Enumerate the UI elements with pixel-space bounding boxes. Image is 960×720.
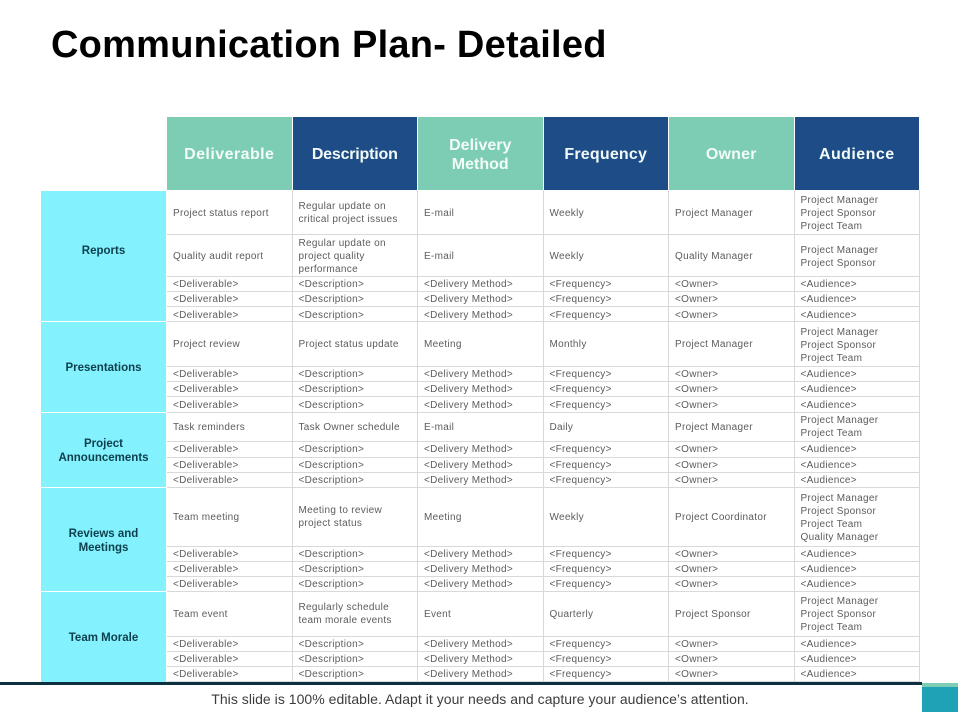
- table row: placeholder: <Owner>: [675, 564, 718, 574]
- table row: placeholder: <Audience>: [800, 368, 857, 380]
- table row: Task reminders: Project Team: [800, 428, 862, 439]
- row label: Team Morale: Team Morale: [69, 632, 138, 644]
- table row: Team meeting: Meeting: [424, 512, 462, 522]
- table row: placeholder: <Owner>: [675, 578, 718, 590]
- table row: Project review: Meeting: [424, 338, 462, 350]
- table row: Project status report: Regular update on: [298, 201, 386, 212]
- table row: placeholder: <Deliverable>: [173, 310, 239, 320]
- table row: placeholder: <Audience>: [800, 548, 857, 560]
- table row: placeholder: <Deliverable>: [173, 578, 239, 590]
- table row: placeholder: <Description>: [298, 310, 364, 320]
- table row: Task reminders: Project Manager: [675, 422, 753, 432]
- table row: placeholder: <Deliverable>: [173, 460, 239, 470]
- table row: placeholder: <Delivery Method>: [424, 460, 513, 470]
- table row: Team meeting: Project Sponsor: [800, 506, 876, 517]
- table row: Team event: Project Team: [800, 622, 862, 632]
- table row: placeholder: <Deliverable>: [173, 564, 239, 574]
- table row: placeholder: <Deliverable>: [173, 654, 239, 664]
- table row: Quality audit report: performance: [298, 264, 358, 275]
- row label: Team Morale: [41, 592, 166, 682]
- table row: Team event: Event: [424, 608, 451, 620]
- table row: Quality audit report: Weekly: [550, 251, 584, 262]
- table row: placeholder: <Owner>: [675, 310, 718, 320]
- table row: placeholder: <Audience>: [800, 474, 857, 486]
- header: Audience: Audience: [819, 146, 895, 163]
- table row: placeholder: <Owner>: [675, 368, 718, 380]
- table row: placeholder: <Description>: [298, 638, 364, 650]
- table row: Project status report: Project status report: [173, 208, 269, 218]
- table row: placeholder: <Deliverable>: [173, 294, 239, 304]
- table row: placeholder: [167, 382, 920, 397]
- table row: Project status report: Weekly: [550, 208, 584, 218]
- table row: placeholder: <Audience>: [800, 564, 857, 574]
- table row: placeholder: <Description>: [298, 384, 364, 394]
- table row: placeholder: <Deliverable>: [173, 444, 239, 455]
- footer corner square: [922, 683, 958, 712]
- header: Description: Description: [312, 146, 398, 163]
- table row: placeholder: <Owner>: [675, 384, 718, 394]
- header: Audience: [794, 117, 919, 190]
- table row: Team meeting: [167, 488, 920, 547]
- table row: placeholder: <Description>: [298, 368, 364, 380]
- table row: Project review: Project Team: [800, 352, 862, 364]
- table row: Project review: Project Sponsor: [800, 340, 876, 350]
- table row: placeholder: <Description>: [298, 654, 364, 664]
- table row: Team meeting: Weekly: [550, 512, 584, 522]
- table row: placeholder: <Frequency>: [550, 654, 612, 664]
- table row: placeholder: <Deliverable>: [173, 368, 239, 380]
- table row: placeholder: <Owner>: [675, 400, 718, 411]
- table row: Team event: Project Sponsor: [675, 608, 751, 620]
- table row: placeholder: <Description>: [298, 668, 364, 680]
- table row: Team event: Project Manager: [800, 596, 878, 606]
- table row: placeholder: <Frequency>: [550, 564, 612, 574]
- table row: Quality audit report: Regular update on: [298, 238, 386, 249]
- table row: placeholder: [167, 307, 920, 322]
- table row: placeholder: [167, 547, 920, 562]
- table row: Team event: Quarterly: [550, 608, 593, 620]
- table row: placeholder: <Deliverable>: [173, 400, 239, 411]
- table row: Project status report: E-mail: [424, 208, 454, 218]
- table row: Task reminders: Project Manager: [800, 415, 878, 426]
- table row: Quality audit report: project quality: [298, 251, 365, 262]
- table row: Task reminders: E-mail: [424, 422, 454, 432]
- footer text: This slide is 100% editable. Adapt it your needs and capture your audience’s attention.: [211, 691, 749, 707]
- table row: placeholder: <Description>: [298, 460, 364, 470]
- table row: Team meeting: Meeting to review: [298, 505, 382, 516]
- table row: placeholder: <Delivery Method>: [424, 474, 513, 486]
- row label: Project Announcements: Project: [84, 438, 123, 450]
- table row: placeholder: <Owner>: [675, 654, 718, 664]
- table row: placeholder: <Description>: [298, 400, 364, 411]
- table row: Project status report: Project Manager: [675, 208, 753, 218]
- table row: placeholder: <Delivery Method>: [424, 548, 513, 560]
- table row: placeholder: <Delivery Method>: [424, 654, 513, 664]
- table row: placeholder: <Delivery Method>: [424, 578, 513, 590]
- table row: placeholder: <Description>: [298, 548, 364, 560]
- table row: Quality audit report: Project Manager: [800, 244, 878, 256]
- table row: placeholder: <Delivery Method>: [424, 638, 513, 650]
- table row: placeholder: [167, 442, 920, 458]
- table row: placeholder: <Delivery Method>: [424, 278, 513, 290]
- row label: Presentations: Presentations: [65, 362, 142, 374]
- table row: Project review: Project Manager: [800, 326, 878, 338]
- table row: placeholder: <Frequency>: [550, 668, 612, 680]
- table row: Team event: Team event: [173, 608, 228, 620]
- table row: placeholder: <Audience>: [800, 460, 857, 470]
- table row: placeholder: [167, 458, 920, 473]
- table row: Team meeting: Team meeting: [173, 512, 239, 522]
- table row: Quality audit report: E-mail: [424, 251, 454, 262]
- table row: placeholder: [167, 667, 920, 682]
- table row: Task reminders: Task reminders: [173, 422, 245, 432]
- table row: placeholder: <Audience>: [800, 654, 857, 664]
- table row: Project review: [167, 322, 920, 367]
- table row: Team event: Project Sponsor: [800, 608, 876, 620]
- table row: Team meeting: Quality Manager: [800, 532, 878, 543]
- table row: Quality audit report: Quality audit report: [173, 251, 264, 262]
- header: Delivery Method: Method: [452, 156, 509, 172]
- table row: placeholder: <Owner>: [675, 668, 718, 680]
- row label: Project Announcements: Announcements: [58, 452, 149, 464]
- row label: Reports: Reports: [82, 244, 125, 256]
- table row: Quality audit report: [167, 235, 920, 277]
- table row: placeholder: <Owner>: [675, 278, 718, 290]
- table row: placeholder: <Frequency>: [550, 294, 612, 304]
- table row: placeholder: <Deliverable>: [173, 384, 239, 394]
- header: Description: [292, 117, 417, 190]
- table row: Project review: Project review: [173, 338, 240, 350]
- footer rule: [0, 682, 922, 685]
- table row: Project review: Project Manager: [675, 338, 753, 350]
- row label: Reviews and Meetings: Meetings: [79, 542, 128, 554]
- table row: Team event: Regularly schedule: [298, 602, 389, 613]
- header: Delivery Method: Delivery: [449, 136, 511, 154]
- table row: placeholder: <Description>: [298, 564, 364, 574]
- table row: Project status report: Project Team: [800, 220, 862, 232]
- table row: placeholder: <Owner>: [675, 460, 718, 470]
- table row: placeholder: <Frequency>: [550, 444, 612, 455]
- table row: placeholder: <Audience>: [800, 278, 857, 290]
- table row: Project status report: Project Manager: [800, 194, 878, 206]
- table row: placeholder: <Owner>: [675, 444, 718, 455]
- table row: Quality audit report: Project Sponsor: [800, 258, 876, 268]
- table row: placeholder: <Owner>: [675, 294, 718, 304]
- header: Owner: Owner: [706, 146, 757, 163]
- table row: placeholder: [167, 652, 920, 667]
- table row: Team event: [167, 592, 920, 637]
- table row: Project review: Project status update: [298, 338, 399, 350]
- table row: placeholder: <Description>: [298, 278, 364, 290]
- row label: Project Announcements: [41, 413, 166, 487]
- table row: placeholder: <Deliverable>: [173, 548, 239, 560]
- header: Deliverable: Deliverable: [184, 146, 274, 163]
- row label: Reports: [41, 191, 166, 321]
- header: Frequency: Frequency: [564, 146, 647, 163]
- table row: placeholder: <Audience>: [800, 400, 857, 411]
- table row: placeholder: <Delivery Method>: [424, 400, 513, 411]
- table row: Team meeting: Project Coordinator: [675, 512, 767, 522]
- table row: placeholder: <Frequency>: [550, 474, 612, 486]
- table row: placeholder: <Description>: [298, 294, 364, 304]
- table row: placeholder: <Delivery Method>: [424, 310, 513, 320]
- header: Delivery Method: [418, 117, 542, 190]
- table row: Project review: Monthly: [550, 338, 587, 350]
- table row: Project status report: Project Sponsor: [800, 208, 876, 218]
- table row: placeholder: <Frequency>: [550, 548, 612, 560]
- table row: placeholder: [167, 277, 920, 292]
- table row: placeholder: <Description>: [298, 474, 364, 486]
- table row: placeholder: <Deliverable>: [173, 474, 239, 486]
- table row: placeholder: [167, 637, 920, 652]
- table row: placeholder: <Frequency>: [550, 638, 612, 650]
- table row: placeholder: <Audience>: [800, 294, 857, 304]
- table row: placeholder: <Frequency>: [550, 368, 612, 380]
- table row: placeholder: <Deliverable>: [173, 278, 239, 290]
- table row: placeholder: <Frequency>: [550, 310, 612, 320]
- table row: Quality audit report: Quality Manager: [675, 251, 753, 262]
- table row: placeholder: [167, 473, 920, 488]
- table row: Project status report: critical project issues: [298, 214, 398, 225]
- table row: Team meeting: Project Manager: [800, 493, 878, 504]
- table row: placeholder: <Frequency>: [550, 384, 612, 394]
- table row: Task reminders: Daily: [550, 422, 573, 432]
- table row: Task reminders: [167, 413, 920, 442]
- table row: placeholder: [167, 367, 920, 382]
- table row: placeholder: <Description>: [298, 578, 364, 590]
- table row: Team meeting: project status: [298, 518, 362, 529]
- table row: Team meeting: Project Team: [800, 519, 862, 530]
- table row: placeholder: <Deliverable>: [173, 668, 239, 680]
- table row: placeholder: <Delivery Method>: [424, 384, 513, 394]
- table row: placeholder: [167, 292, 920, 307]
- table row: placeholder: <Delivery Method>: [424, 368, 513, 380]
- table row: placeholder: <Deliverable>: [173, 638, 239, 650]
- table row: placeholder: <Audience>: [800, 310, 857, 320]
- table row: placeholder: [167, 397, 920, 413]
- table row: placeholder: <Owner>: [675, 638, 718, 650]
- table row: placeholder: <Audience>: [800, 638, 857, 650]
- table row: placeholder: <Delivery Method>: [424, 668, 513, 680]
- table row: placeholder: <Audience>: [800, 578, 857, 590]
- table row: placeholder: <Owner>: [675, 548, 718, 560]
- table row: placeholder: <Frequency>: [550, 400, 612, 411]
- table row: placeholder: <Description>: [298, 444, 364, 455]
- title: Communication Plan- Detailed: [51, 24, 607, 66]
- row label: Presentations: [41, 322, 166, 412]
- table row: Task reminders: Task Owner schedule: [298, 422, 400, 432]
- header: Frequency: [544, 117, 668, 190]
- table row: Team event: team morale events: [298, 615, 392, 626]
- table row: placeholder: <Delivery Method>: [424, 444, 513, 455]
- table row: placeholder: <Delivery Method>: [424, 564, 513, 574]
- table row: placeholder: <Audience>: [800, 384, 857, 394]
- table row: placeholder: [167, 577, 920, 592]
- table row: placeholder: <Owner>: [675, 474, 718, 486]
- table row: placeholder: <Frequency>: [550, 578, 612, 590]
- row label: Reviews and Meetings: Reviews and: [69, 528, 138, 540]
- table row: placeholder: <Frequency>: [550, 460, 612, 470]
- row label: Reviews and Meetings: [41, 488, 166, 591]
- header: Deliverable: [167, 117, 292, 190]
- table row: Project status report: [167, 190, 920, 235]
- table row: placeholder: [167, 562, 920, 577]
- table row: placeholder: <Audience>: [800, 668, 857, 680]
- table row: placeholder: <Delivery Method>: [424, 294, 513, 304]
- header: Owner: [669, 117, 794, 190]
- table row: placeholder: <Audience>: [800, 444, 857, 455]
- table row: placeholder: <Frequency>: [550, 278, 612, 290]
